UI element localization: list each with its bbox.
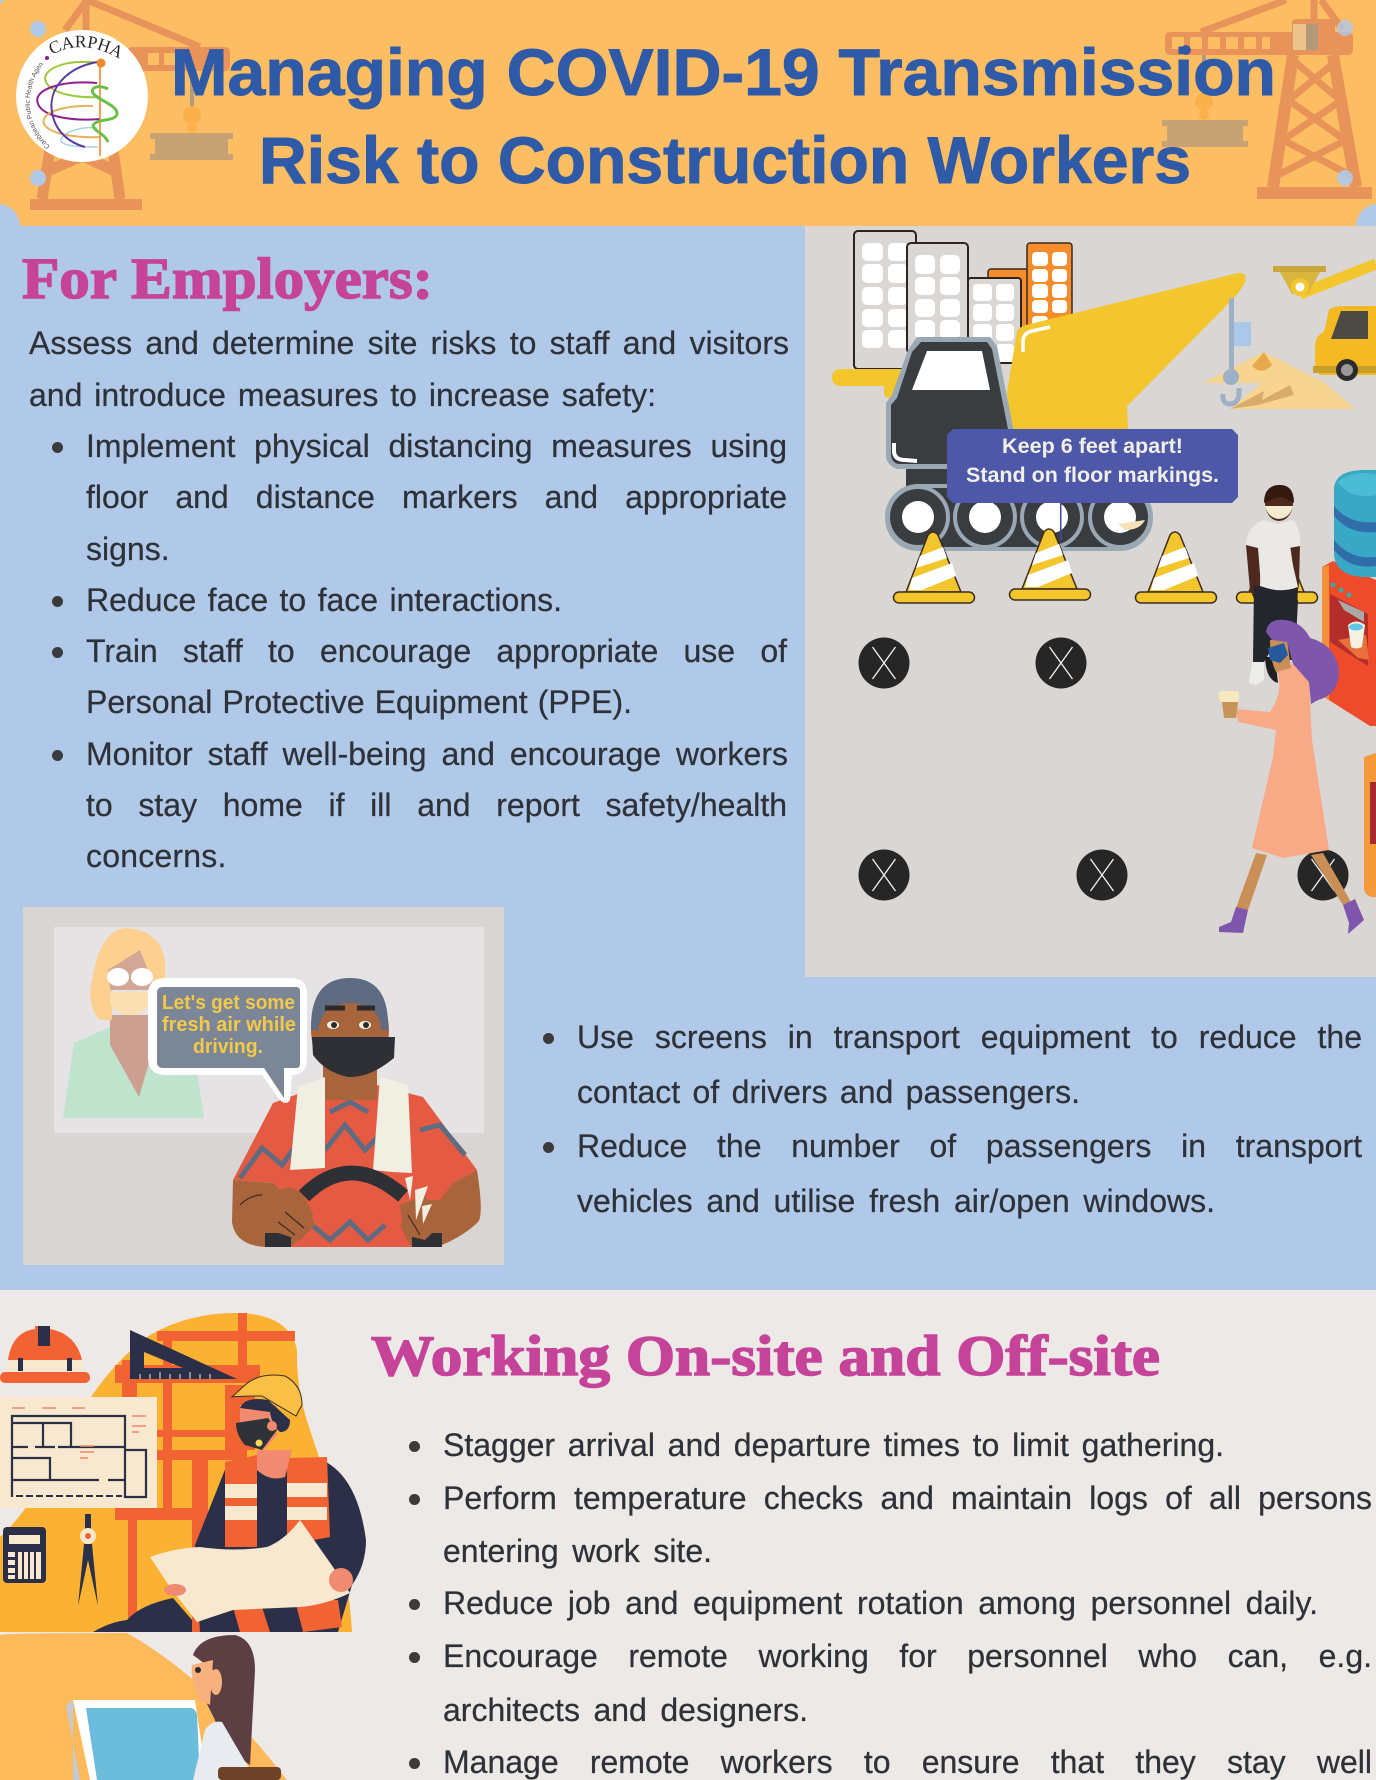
- icon: calculator: [3, 1527, 46, 1583]
- illustration: remote worker at laptop: [0, 1633, 287, 1780]
- bullet: train staff: Train staff to encourage appropriate use of: [86, 633, 787, 669]
- icon: crane truck: [832, 273, 1246, 551]
- text block: introduction: [28, 325, 789, 413]
- bullet: fewer passengers: Reduce the number of passengers in transport: [577, 1128, 1362, 1164]
- bullet: monitor well-being: concerns.: [86, 838, 227, 874]
- figure: driver: [232, 978, 481, 1247]
- bullet: remote working: architects and designers.: [443, 1692, 808, 1728]
- speech bubble: fresh air while: [162, 1014, 296, 1036]
- bullet: monitor well-being: to stay home if ill and report safety/health: [86, 787, 787, 823]
- bullet: temperature checks: [409, 1480, 1372, 1569]
- decorative dots: [0, 0, 1376, 248]
- bullet: train staff: Personal Protective Equipment (PPE).: [86, 684, 632, 720]
- callout: keep 6 feet apart: [947, 429, 1238, 503]
- bullet: temperature checks: entering work site.: [443, 1533, 712, 1569]
- bullet: physical distancing: Implement physical distancing measures using: [86, 428, 787, 464]
- icon: hard hat: [0, 1326, 90, 1383]
- panel: site illustration: [805, 226, 1376, 977]
- bullet: stagger arrival: Stagger arrival and departure times to limit gathering.: [443, 1427, 1224, 1463]
- speech bubble: [148, 978, 307, 1103]
- title: Risk to Construction Workers: [259, 123, 1191, 197]
- icon: traffic cones: [894, 529, 1318, 603]
- bullet: monitor well-being: [52, 736, 788, 874]
- figure: woman with purple hair and coffee: [1219, 620, 1364, 934]
- bullet: rotation: Reduce job and equipment rotation among personnel daily.: [443, 1585, 1318, 1621]
- bullet: manage remote workers: Manage remote workers to ensure that they stay well: [443, 1744, 1372, 1780]
- bullet: physical distancing: [52, 428, 787, 567]
- bullet: transport screens: contact of drivers and passengers.: [577, 1074, 1080, 1110]
- icon: set square: [130, 1330, 237, 1379]
- header banner: [0, 0, 1376, 226]
- bullet: fewer passengers: [543, 1128, 1362, 1219]
- speech bubble: Let's get some: [162, 992, 295, 1014]
- figure: worker: [93, 1375, 366, 1632]
- bullet: monitor well-being: Monitor staff well-being and encourage workers: [86, 736, 788, 772]
- heading: Working On-site and Off-site: Working On-site and Off-site: [371, 1325, 1160, 1388]
- title: [171, 35, 1276, 197]
- bullet: remote working: [409, 1638, 1372, 1728]
- callout: keep 6 feet apart: Keep 6 feet apart!: [1002, 435, 1183, 458]
- icon: city buildings: [854, 231, 1072, 369]
- text block: introduction: Assess and determine site risks to staff and visitors: [29, 325, 789, 361]
- panel: driver illustration: [23, 907, 504, 1265]
- icon: water coolers: [1322, 470, 1376, 897]
- illustration: construction worker with plans: [0, 1313, 366, 1632]
- bullet: physical distancing: signs.: [86, 531, 170, 567]
- callout: keep 6 feet apart: Stand on floor markings.: [966, 464, 1219, 487]
- figure: man in white t-shirt: [1246, 485, 1300, 685]
- icon: excavator arm, sand pile and dump truck: [1203, 264, 1376, 409]
- icon: left crane: [30, 0, 233, 210]
- heading: For Employers: For Employers:: [22, 246, 433, 311]
- icon: compass: [78, 1514, 98, 1606]
- bullet: train staff: [52, 633, 788, 720]
- icon: right crane: [1162, 0, 1372, 199]
- icon: blueprint: [0, 1397, 157, 1508]
- logo wordmark: CARPHA: [50, 36, 120, 59]
- bullet: physical distancing: floor and distance markers and appropriate: [86, 479, 787, 515]
- bullet: temperature checks: Perform temperature checks and maintain logs of all persons: [443, 1480, 1372, 1516]
- panel: working on-site and off-site background: [0, 1290, 1376, 1780]
- floor markers: [858, 638, 1348, 900]
- speech bubble: driving.: [193, 1036, 263, 1058]
- logo: CARPHA: [16, 30, 148, 162]
- bullet: transport screens: [543, 1019, 1362, 1110]
- bullet: face to face: Reduce face to face interactions.: [86, 582, 562, 618]
- figure: passenger on screen: [63, 928, 204, 1118]
- bullet: fewer passengers: vehicles and utilise fresh air/open windows.: [577, 1183, 1215, 1219]
- text block: introduction: and introduce measures to increase safety:: [29, 377, 656, 413]
- title: Managing COVID-19 Transmission: [171, 35, 1276, 109]
- bullet: transport screens: Use screens in transport equipment to reduce the: [577, 1019, 1362, 1055]
- bullet: remote working: Encourage remote working for personnel who can, e.g.: [443, 1638, 1372, 1674]
